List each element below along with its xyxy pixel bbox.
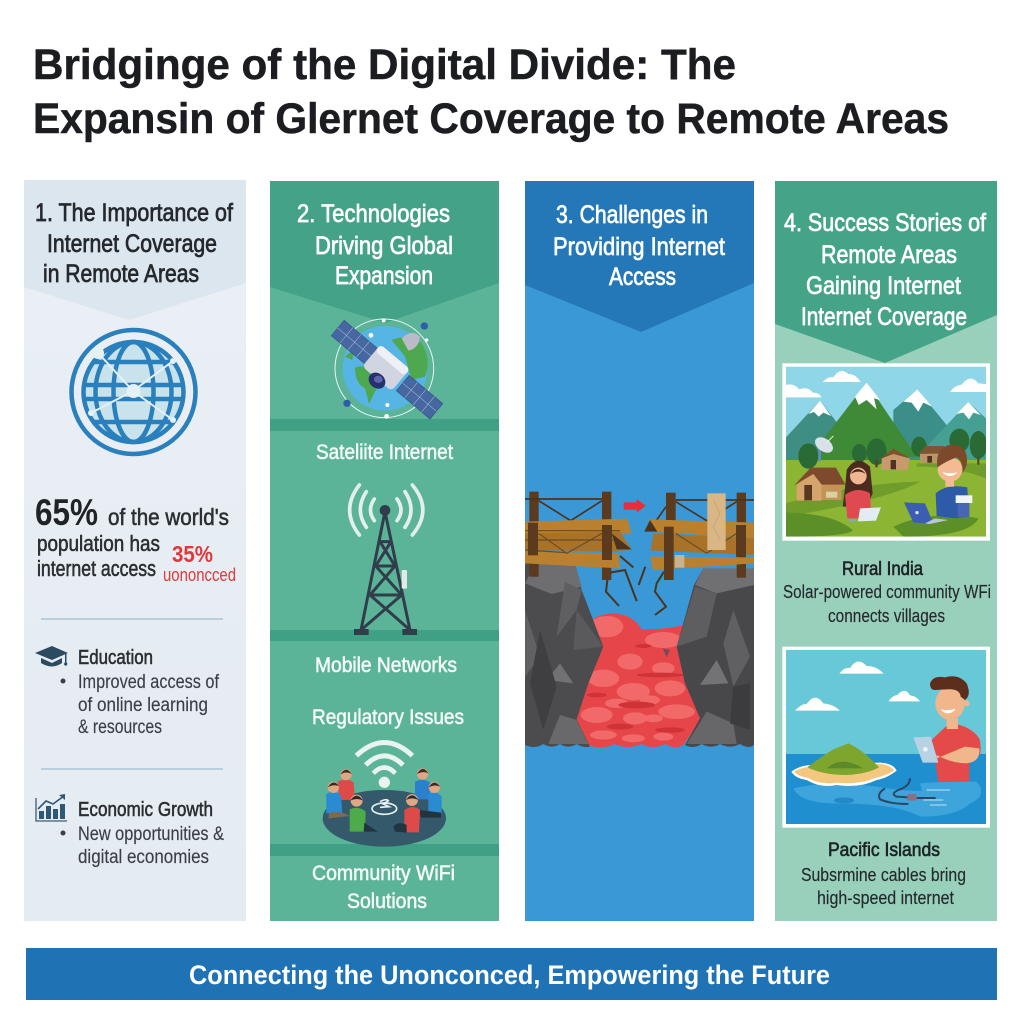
panel 2 heading: Driving Global bbox=[315, 232, 453, 260]
panel 3 heading: 3. Challenges in bbox=[556, 201, 708, 229]
panel 2 header chevron bbox=[270, 181, 499, 323]
caption: rural india: connects villages bbox=[828, 606, 945, 626]
title: Bridginge of the Digital Divide: The bbox=[33, 41, 736, 89]
statistic: 65% with internet access bbox=[35, 492, 229, 581]
label: community wifi solutions: Solutions bbox=[347, 890, 427, 913]
benefit: education: of online learning bbox=[78, 695, 208, 716]
benefit: education: & resources bbox=[78, 717, 162, 738]
statistic: 35% unconnected: 35% bbox=[172, 541, 213, 567]
panel 3 heading: Providing Internet bbox=[553, 233, 725, 261]
icon: growth chart bbox=[36, 794, 67, 821]
label: satellite internet: Sateliite Internet bbox=[316, 441, 453, 464]
label: community wifi solutions bbox=[312, 862, 455, 913]
panel 3 heading bbox=[553, 201, 725, 291]
panel 4 heading bbox=[784, 209, 986, 331]
label: mobile networks: Mobile Networks bbox=[315, 654, 457, 677]
caption: rural india: Rural India bbox=[842, 559, 923, 580]
right cliff bbox=[677, 568, 754, 747]
icon: community wifi group bbox=[323, 742, 446, 847]
footer banner: Connecting the Unonconced, Empowering the Future bbox=[189, 960, 830, 990]
panel 4 heading: Internet Coverage bbox=[801, 303, 967, 331]
caption: rural india bbox=[783, 559, 991, 626]
illustration: pacific islands bbox=[782, 647, 990, 828]
panel 1 heading bbox=[35, 199, 233, 288]
caption: pacific islands: Pacific Islands bbox=[828, 840, 940, 861]
benefit: education bbox=[60, 647, 220, 738]
icon: globe bbox=[72, 330, 196, 454]
label: community wifi solutions: Community WiFi bbox=[312, 862, 455, 885]
arrow bbox=[624, 499, 646, 513]
panel 4 heading: 4. Success Stories of bbox=[784, 209, 986, 237]
title bbox=[33, 41, 949, 143]
panel: technologies bbox=[270, 181, 499, 921]
caption: rural india: Solar-powered community WFi bbox=[783, 582, 991, 602]
caption: pacific islands: Subsrmine cables bring bbox=[801, 865, 966, 885]
statistic: 35% unconnected: uononcced bbox=[163, 565, 236, 585]
panel 1 heading: Internet Coverage bbox=[47, 230, 217, 258]
statistic: 65% with internet access: of the world's bbox=[108, 504, 229, 530]
illustration: rural india bbox=[782, 363, 990, 541]
footer banner bbox=[26, 948, 997, 1000]
panel: importance of internet coverage bbox=[24, 180, 246, 921]
caption: pacific islands: high-speed internet bbox=[817, 888, 954, 908]
left bridge bbox=[525, 492, 645, 606]
panel: challenges bbox=[525, 181, 754, 921]
panel 3 heading: Access bbox=[609, 263, 676, 291]
panel 2 heading: 2. Technologies bbox=[297, 200, 450, 228]
icon: graduation cap bbox=[35, 646, 68, 666]
statistic: 65% with internet access: 65% bbox=[35, 492, 98, 533]
illustration: broken bridge over chasm bbox=[525, 492, 754, 747]
panel: success stories bbox=[775, 181, 997, 921]
statistic: 65% with internet access: internet access bbox=[37, 556, 156, 581]
statistic: 35% unconnected bbox=[163, 541, 236, 585]
icon: cell tower bbox=[350, 485, 423, 635]
benefit: education: Improved access of bbox=[78, 672, 220, 693]
panel 2 heading bbox=[297, 200, 453, 290]
panel 4 heading: Gaining Internet bbox=[806, 272, 961, 300]
panel 2 heading: Expansion bbox=[335, 262, 433, 290]
panel 1 heading: in Remote Areas bbox=[43, 260, 199, 288]
statistic: 65% with internet access: population has bbox=[37, 531, 160, 556]
panel 1 header chevron bbox=[24, 180, 246, 320]
benefit: economic growth bbox=[60, 799, 224, 868]
panel 3 header chevron bbox=[525, 181, 754, 332]
benefit: economic growth: New opportunities & bbox=[78, 824, 224, 845]
panel 1 heading: 1. The Importance of bbox=[35, 199, 233, 227]
icon: satellite and earth bbox=[331, 318, 443, 419]
label: regulatory issues: Regulatory Issues bbox=[312, 706, 464, 729]
benefit: economic growth: digital economies bbox=[78, 847, 209, 868]
benefit: education: Education bbox=[78, 647, 153, 669]
panel 4 heading: Remote Areas bbox=[821, 241, 957, 269]
left cliff bbox=[525, 563, 603, 747]
caption: pacific islands bbox=[801, 840, 966, 908]
benefit: economic growth: Economic Growth bbox=[78, 799, 213, 821]
panel 4 header chevron bbox=[775, 181, 997, 363]
right bridge bbox=[644, 493, 754, 615]
title: Expansin of Glernet Coverage to Remote Areas bbox=[33, 95, 949, 143]
chasm red hazard bbox=[577, 613, 702, 747]
